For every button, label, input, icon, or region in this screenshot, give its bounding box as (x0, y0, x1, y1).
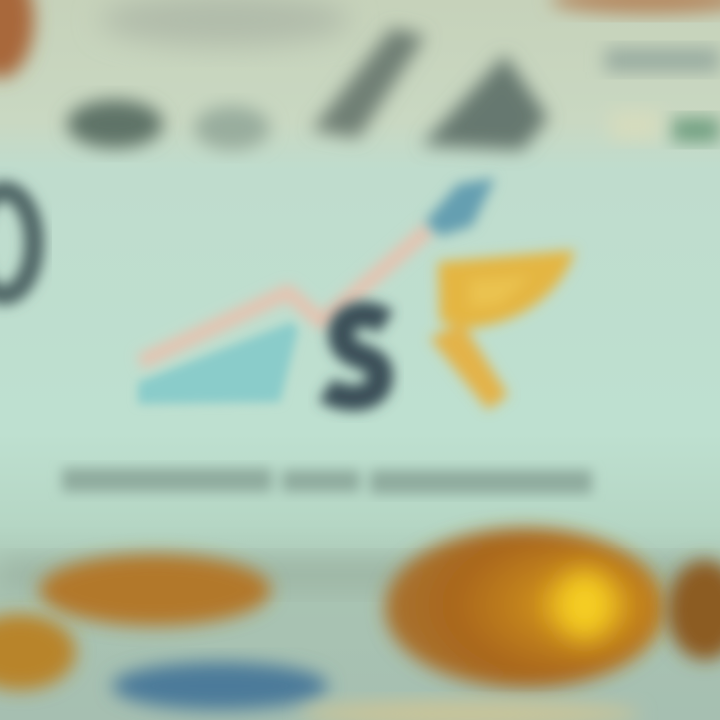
diagonal dark icon (312, 28, 425, 138)
top right green mark (672, 118, 720, 142)
dollar sign (326, 315, 386, 398)
coin glow (557, 571, 613, 639)
area fill (138, 322, 298, 404)
arrow head (425, 178, 495, 236)
top left coin (0, 0, 34, 78)
dark triangle icon (422, 55, 548, 150)
top right coin edge (550, 0, 720, 14)
far right coin (667, 560, 720, 660)
pale highlight (610, 110, 660, 140)
top centre pale shape (100, 0, 350, 46)
large right coin (385, 528, 665, 688)
trend line (140, 228, 430, 362)
emblem shading (470, 276, 530, 308)
rising line chart with area (138, 178, 495, 404)
yellow emblem (430, 250, 575, 410)
bottom coins (0, 528, 720, 720)
bottom pale area (300, 700, 640, 720)
left partial ring icon (0, 191, 34, 295)
blurred caption (62, 468, 592, 494)
coin shadow band (0, 560, 720, 590)
top right grey bar (605, 48, 720, 72)
blue bottom shape (112, 662, 328, 710)
left coin (39, 554, 271, 626)
top strip of blurred icons (0, 0, 720, 150)
dark oval icon (67, 100, 163, 148)
lower left coin (0, 614, 76, 690)
grey oval icon (194, 106, 270, 150)
